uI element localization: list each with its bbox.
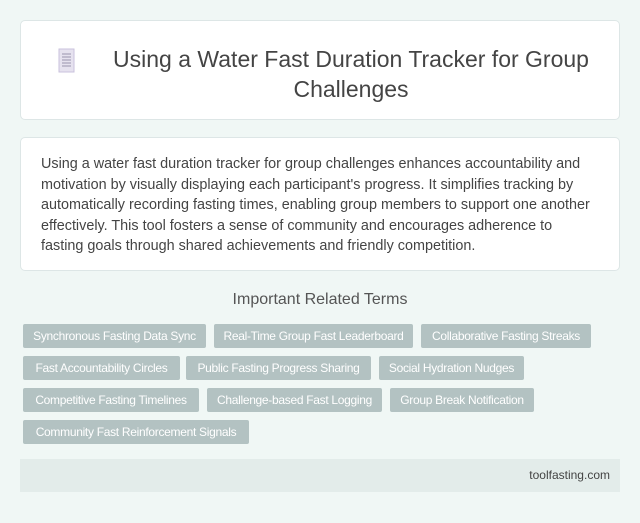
tags: Real-Time Group Fast Leaderboard (223, 329, 404, 343)
footer: toolfasting.com (529, 468, 610, 482)
title: Using a Water Fast Duration Tracker for Group Challenges (113, 46, 589, 102)
tags: Collaborative Fasting Streaks (432, 329, 580, 343)
icon: document scroll (58, 48, 74, 72)
tags: Group Break Notification (400, 393, 524, 407)
tags: Competitive Fasting Timelines (35, 393, 187, 407)
panel: title card (20, 20, 620, 120)
tags: Social Hydration Nudges (389, 361, 514, 375)
tags: Public Fasting Progress Sharing (197, 361, 360, 375)
tags: Challenge-based Fast Logging (217, 393, 372, 407)
tags: Community Fast Reinforcement Signals (36, 425, 236, 439)
heading: related terms: Important Related Terms (233, 291, 407, 308)
text block: Using a water fast duration tracker for group challenges enhances accountability and motivation by visually displaying each participant's progress. It simplifies tracking by automatically recording fasting times, enabling group members to support one another effectively. This tool fosters a sense of community and encourages adherence to fasting goals through shared achievements and friendly competition. (41, 156, 590, 254)
tags: Synchronous Fasting Data Sync (33, 329, 196, 343)
tags: Fast Accountability Circles (36, 361, 167, 375)
footer (20, 459, 620, 492)
panel: description (20, 137, 620, 271)
